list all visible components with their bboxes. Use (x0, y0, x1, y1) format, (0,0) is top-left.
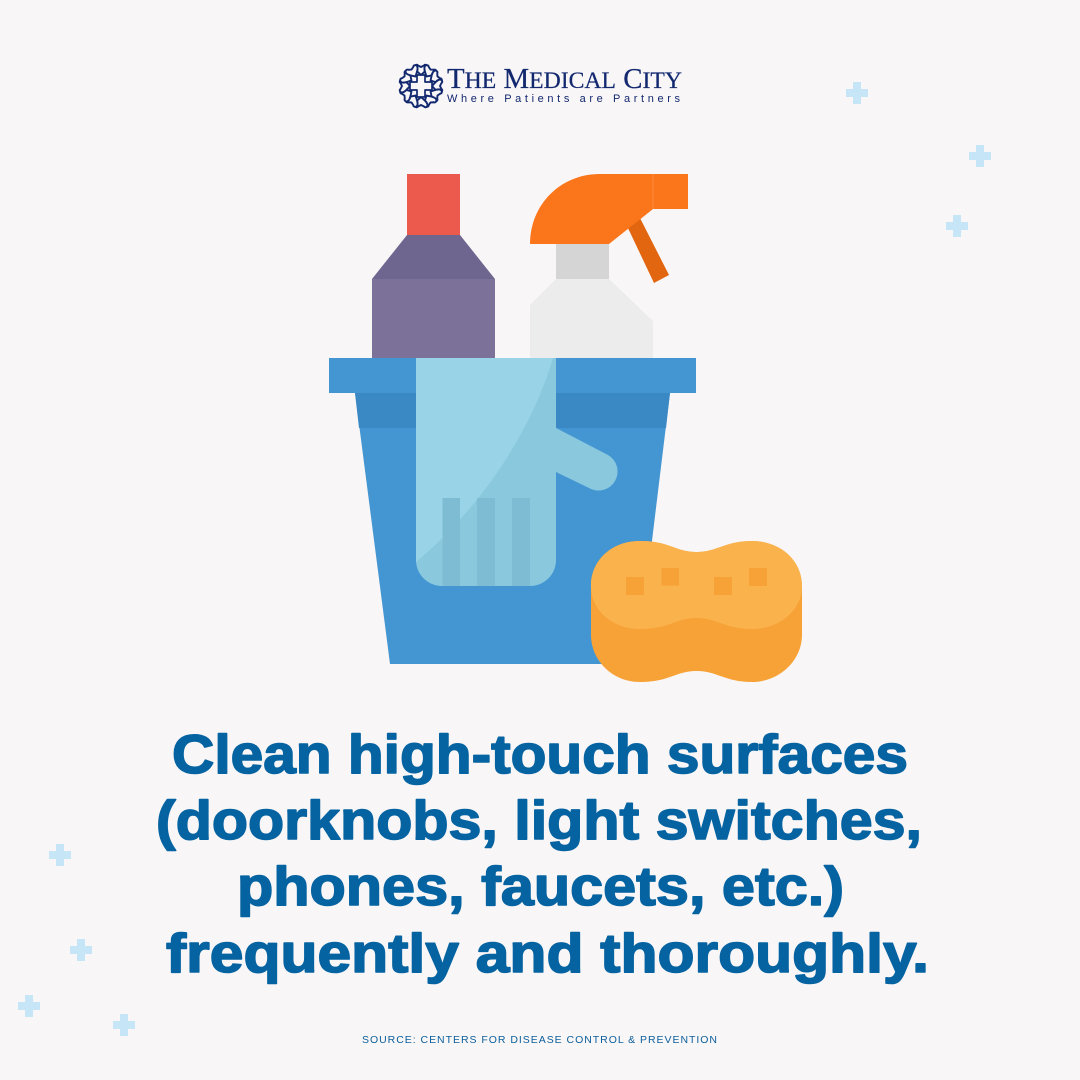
heading: Clean high-touch surfaces (172, 723, 908, 785)
logo: The Medical City (399, 64, 682, 108)
heading: frequently and thoroughly. (166, 922, 929, 984)
logo name: THE MEDICAL CITY (447, 64, 682, 95)
icon: rubber glove (416, 358, 618, 586)
heading: (doorknobs, light switches, (156, 789, 922, 851)
icon: spray bottle (530, 174, 688, 359)
logo tagline: Where Patients are Partners (447, 93, 680, 105)
icon: purple bottle (372, 174, 495, 359)
icon: bucket (329, 358, 696, 664)
heading: phones, faucets, etc.) (237, 855, 844, 917)
illustration: cleaning bucket (329, 174, 802, 682)
decorative plus marks (18, 82, 991, 1036)
icon: logo rosette (399, 64, 443, 108)
source line: SOURCE: CENTERS FOR DISEASE CONTROL & PREVENTION (362, 1034, 717, 1046)
heading (156, 723, 929, 984)
icon: sponge (591, 541, 802, 682)
